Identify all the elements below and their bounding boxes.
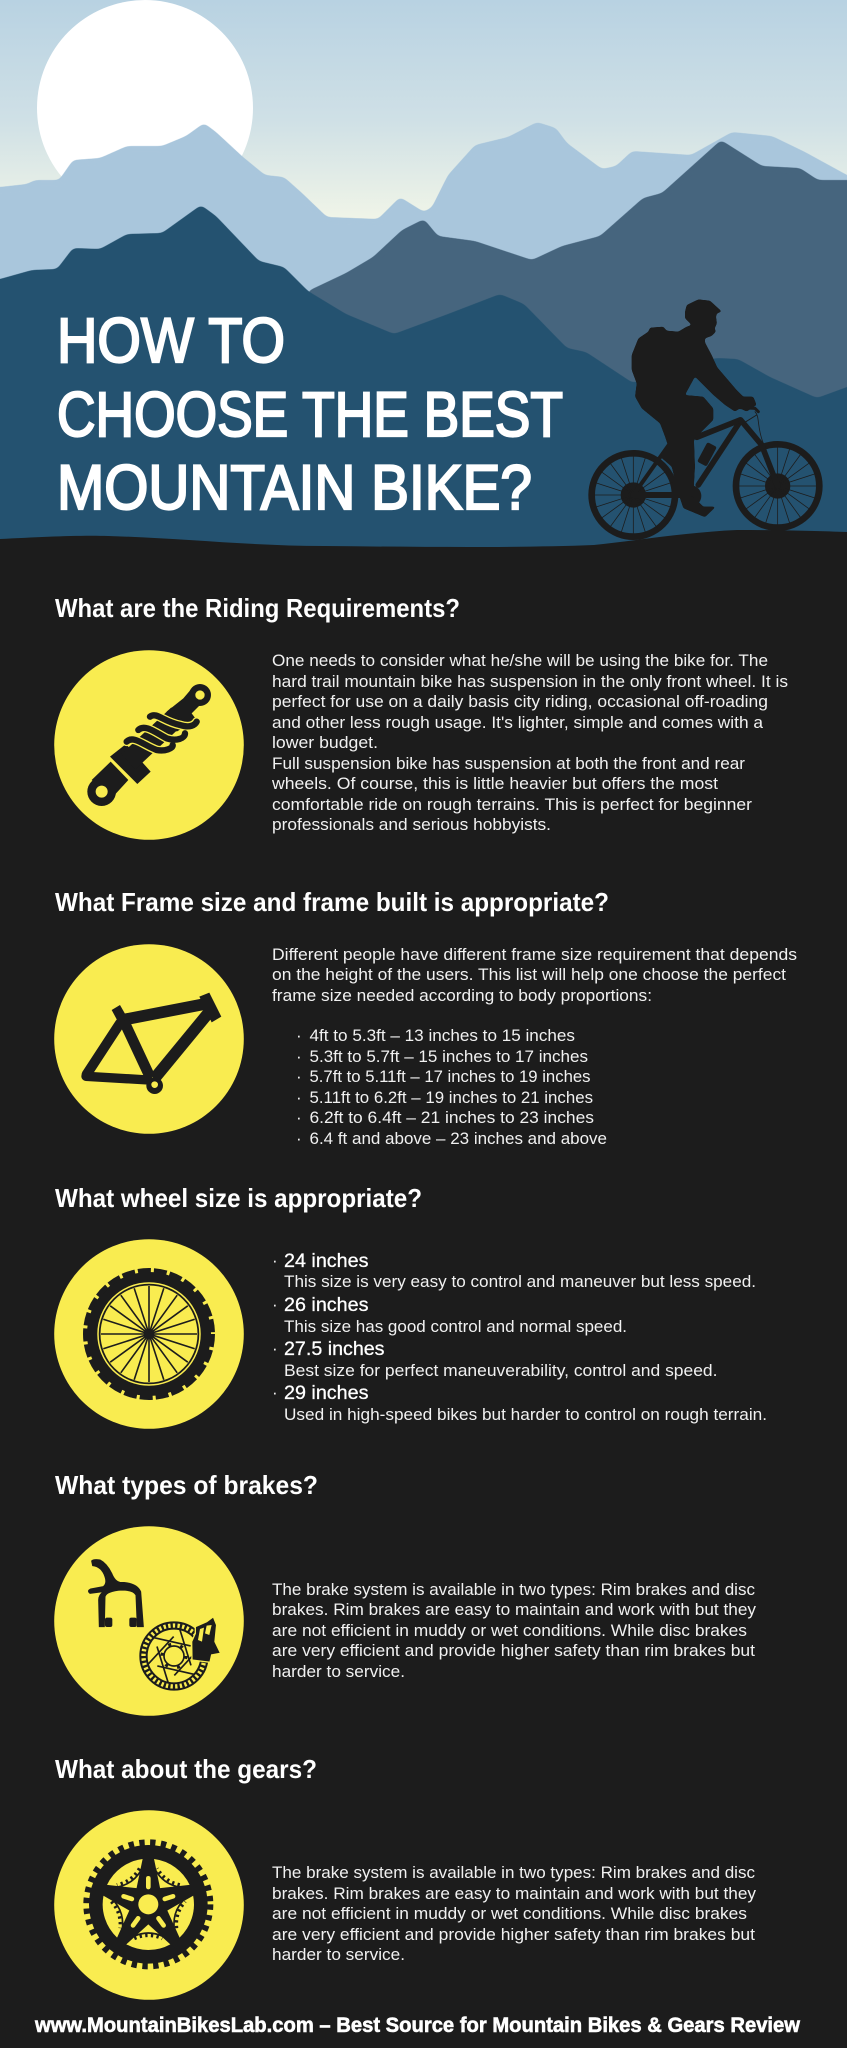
list: frame sizes by height: 6.2ft to 6.4ft – 21 inches to 23 inches [310,1108,594,1127]
icon: chainring on yellow circle [54,1810,244,2000]
rider [632,299,757,517]
list: frame sizes by height: 5.3ft to 5.7ft – 15 inches to 17 inches [310,1047,588,1066]
list: wheel sizes: Best size for perfect maneuverability, control and speed. [284,1361,718,1380]
heading: brakes: What types of brakes? [55,1470,318,1500]
rear wheel [592,453,675,537]
list: frame sizes by height [296,1026,607,1148]
list: frame sizes by height: 5.11ft to 6.2ft – 19 inches to 21 inches [310,1088,593,1107]
title: CHOOSE THE BEST [57,380,563,450]
title: HOW TO [57,306,285,376]
text: riding requirements body [271,651,788,834]
panel: wheel size [54,1183,767,1429]
list: frame sizes by height: · [296,1088,302,1107]
text: riding requirements body: lower budget. [272,733,378,752]
back mountain range [0,122,847,420]
text: riding requirements body: comfortable ride on rough terrains. This is perfect for beginner [272,795,752,814]
footer: www.MountainBikesLab.com – Best Source for Mountain Bikes & Gears Review [34,2014,801,2037]
panel: brakes [54,1470,757,1716]
list: frame sizes by height: · [296,1108,302,1127]
sun [37,0,253,216]
chainring window, bottom [126,1924,170,1950]
heading: wheel size: What wheel size is appropriate? [55,1183,422,1213]
text: gears body: brakes. Rim brakes are easy to maintain and work with but they [272,1884,757,1903]
icon: bike frame on yellow circle [54,944,244,1134]
panel: riding requirements [54,593,788,840]
text: brakes body: The brake system is available in two types: Rim brakes and disc [272,1580,755,1599]
heading: gears: What about the gears? [55,1754,317,1784]
list: wheel sizes: This size is very easy to control and maneuver but less speed. [284,1272,756,1291]
text: brakes body: are very efficient and provide higher safety than rim brakes but [272,1641,755,1660]
heading: frame size: What Frame size and frame built is appropriate? [55,887,609,917]
text: gears body: are very efficient and provide higher safety than rim brakes but [272,1925,755,1944]
list: wheel sizes: · [272,1339,278,1358]
icon: wheel on yellow circle [54,1239,244,1429]
text: brakes body: harder to service. [272,1662,405,1681]
list: frame sizes by height: · [296,1129,302,1148]
chainring spokes and slots [121,1876,176,1929]
text: gears body: harder to service. [272,1945,405,1964]
text: riding requirements body: perfect for use on a daily basis city riding, occasional off-roading [272,692,768,711]
list: frame sizes by height: 4ft to 5.3ft – 13 inches to 15 inches [310,1026,575,1045]
bike frame [633,407,778,507]
front wheel [736,444,819,528]
text: riding requirements body: Full suspension bike has suspension at both the front and rear [272,754,745,773]
text: riding requirements body: wheels. Of course, this is little heavier but offers the most [271,774,718,793]
text: riding requirements body: and other less rough usage. It's lighter, simple and comes with a [272,713,764,732]
chainring window, lower left [98,1890,136,1939]
heading: riding requirements: What are the Riding Requirements? [55,593,460,623]
icon: cyclist silhouette [592,299,819,537]
list: wheel sizes: 24 inches [284,1251,368,1272]
list: frame sizes by height: 5.7ft to 5.11ft – 17 inches to 19 inches [310,1067,590,1086]
list: frame sizes by height: · [296,1026,302,1045]
list: frame sizes by height: 6.4 ft and above – 23 inches and above [310,1129,607,1148]
list: wheel sizes: 27.5 inches [284,1339,384,1360]
text: frame size intro: frame size needed according to body proportions: [272,986,652,1005]
ground [0,530,847,600]
chainring window, upper right [142,1854,193,1901]
icon: suspension shock on yellow circle [54,650,244,840]
panel: frame size [54,887,797,1148]
list: frame sizes by height: · [296,1067,302,1086]
text: riding requirements body: hard trail mountain bike has suspension in the only front wheel. It is [272,672,788,691]
panel: mountain hero scene [0,0,847,600]
list: wheel sizes [272,1251,767,1424]
chainring window, lower right [161,1890,199,1939]
text: gears body: are not efficient in muddy or wet conditions. While disc brakes [272,1904,747,1923]
list: frame sizes by height: · [296,1047,302,1066]
list: wheel sizes: This size has good control and normal speed. [284,1317,627,1336]
text: riding requirements body: One needs to consider what he/she will be using the bike for. The [272,651,768,670]
front mountain range [0,205,847,570]
title: MOUNTAIN BIKE? [57,453,532,523]
text: gears body [272,1863,757,1964]
text: brakes body: brakes. Rim brakes are easy to maintain and work with but they [272,1600,757,1619]
text: frame size intro: Different people have different frame size requirement that depends [272,945,797,964]
sky [0,0,847,240]
list: wheel sizes: 26 inches [284,1295,368,1316]
text: gears body: The brake system is available in two types: Rim brakes and disc [272,1863,755,1882]
text: riding requirements body: professionals and serious hobbyists. [272,815,551,834]
panel: gears [54,1754,757,2000]
text: frame size intro [272,945,797,1005]
title [57,306,563,523]
list: wheel sizes: Used in high-speed bikes but harder to control on rough terrain. [284,1405,767,1424]
chainring window, upper left [104,1854,154,1901]
list: wheel sizes: · [272,1295,278,1314]
text: brakes body: are not efficient in muddy or wet conditions. While disc brakes [272,1621,747,1640]
list: wheel sizes: · [272,1251,278,1270]
text: frame size intro: on the height of the users. This list will help one choose the perfect [272,965,786,984]
icon: rim and disc brakes on yellow circle [54,1526,244,1716]
text: brakes body [272,1580,757,1681]
list: wheel sizes: · [272,1383,278,1402]
middle mountain range [308,140,847,470]
list: wheel sizes: 29 inches [284,1383,368,1404]
